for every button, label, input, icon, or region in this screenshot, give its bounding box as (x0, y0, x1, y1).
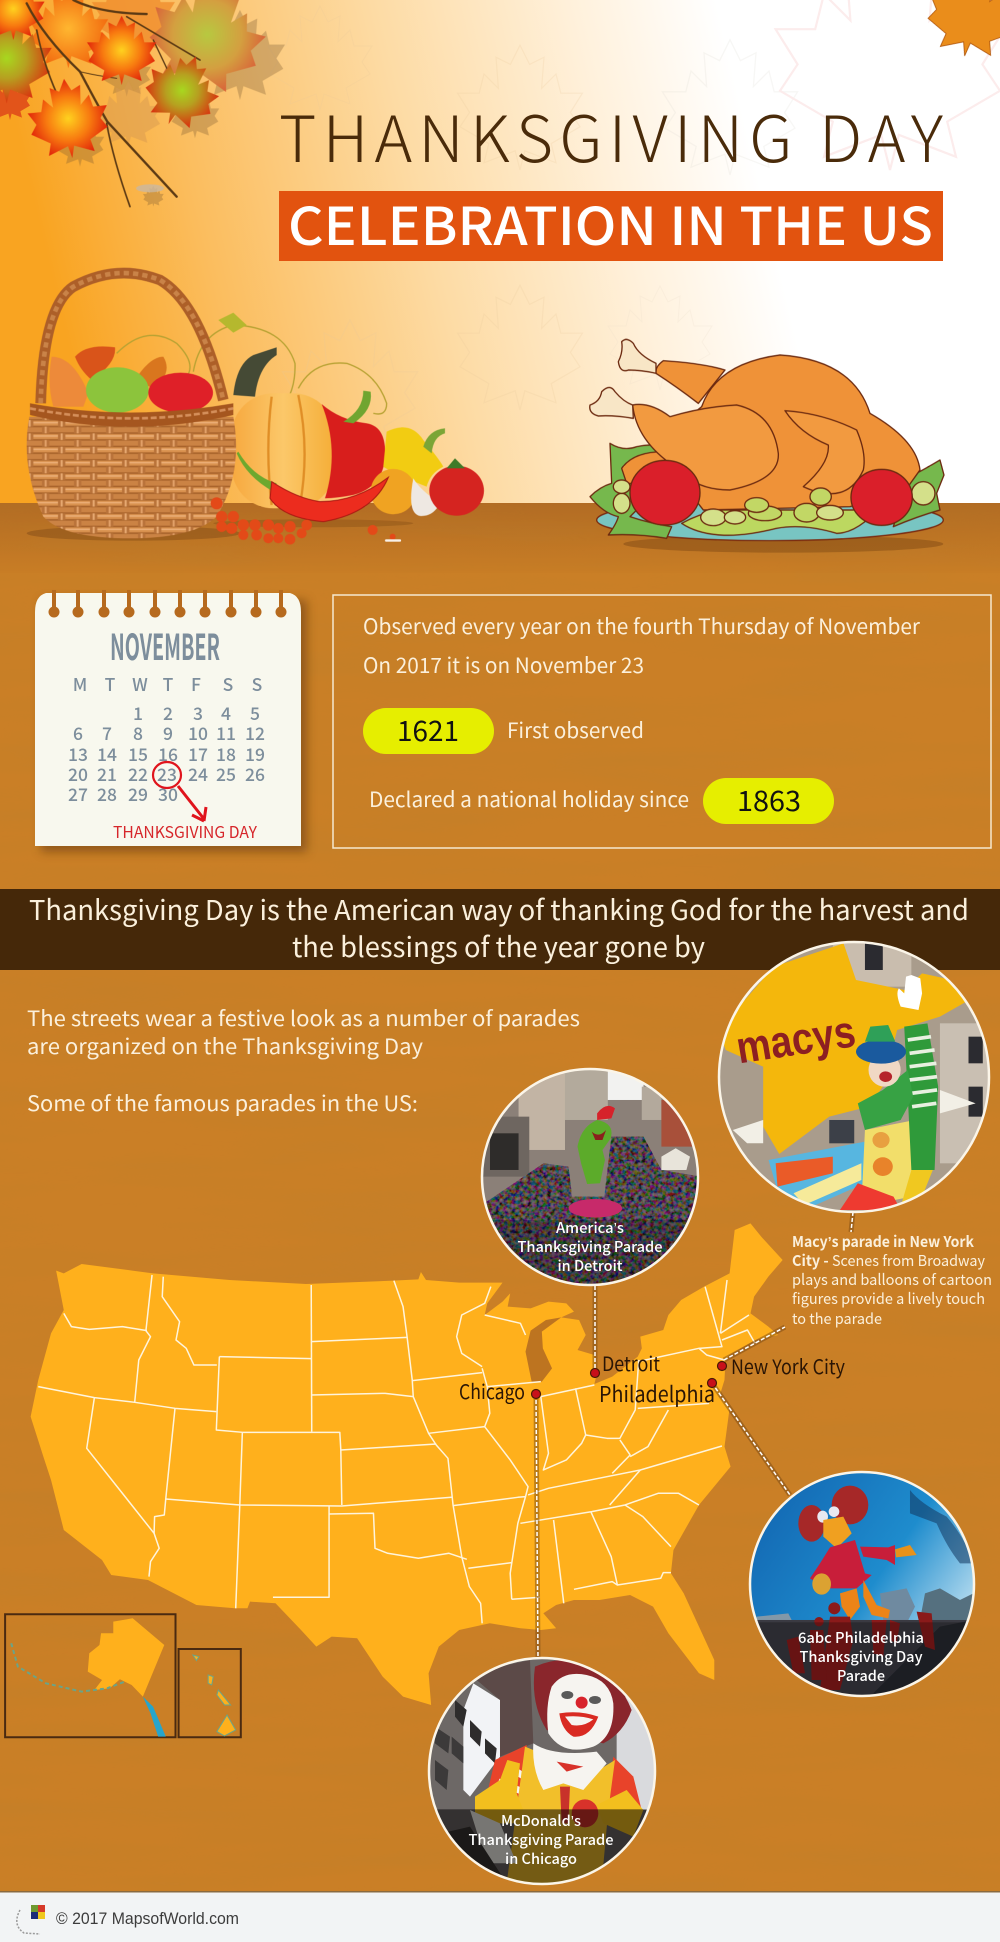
caption: Philadelphia: Parade (837, 1665, 885, 1686)
caption: Philadelphia (798, 1627, 924, 1686)
calendar dates: 15 (128, 742, 148, 767)
title: THANKSGIVING DAY (279, 89, 943, 181)
caption: Chicago: in Chicago (505, 1848, 577, 1869)
calendar dates (68, 701, 265, 807)
text: Macy's parade description: Macy’s parade in New York (792, 1231, 974, 1252)
panel: calendar: THANKSGIVING DAY (113, 819, 257, 843)
city marker: Philadelphia: Philadelphia (599, 1377, 715, 1409)
icon: MapsofWorld logo (17, 1905, 45, 1934)
calendar dates: 30 (158, 782, 178, 807)
calendar dates: 25 (216, 762, 236, 787)
calendar dates: 7 (102, 721, 112, 746)
calendar dates: 21 (97, 762, 117, 787)
illustration: roast turkey on platter (590, 340, 944, 553)
caption: Detroit (518, 1217, 662, 1276)
text: Macy's parade description: plays and balloons of cartoon (792, 1269, 992, 1290)
calendar weekday row: F (191, 672, 201, 697)
calendar weekday row: T (163, 672, 174, 697)
intro text: Some of the famous parades in the US: (27, 1088, 418, 1118)
calendar dates: 12 (245, 721, 265, 746)
title banner: CELEBRATION IN THE US (288, 185, 933, 260)
calendar weekday row: T (105, 672, 116, 697)
calendar dates: 2 (163, 701, 173, 726)
connector: New York (724, 1212, 853, 1360)
panel: key facts: Declared a national holiday since (369, 784, 689, 814)
connector: Detroit (592, 1286, 598, 1372)
pill: 1621 (363, 708, 494, 754)
city marker: Chicago: Chicago (459, 1376, 525, 1405)
panel: calendar: NOVEMBER (110, 619, 220, 671)
text: Macy's parade description: to the parade (792, 1308, 882, 1329)
footer: © 2017 MapsofWorld.com (56, 1910, 239, 1928)
statement band: the blessings of the year gone by (292, 925, 705, 965)
faint leaf outlines in header (268, 0, 1000, 455)
leaf: top right corner (921, 0, 1000, 64)
calendar dates: 11 (216, 721, 236, 746)
inset: Hawaii (179, 1649, 241, 1737)
intro text: are organized on the Thanksgiving Day (27, 1031, 423, 1061)
calendar dates: 22 (128, 762, 148, 787)
calendar dates: 28 (97, 782, 117, 807)
calendar dates: 10 (188, 721, 208, 746)
background: header gradient (0, 0, 1000, 503)
statement band: Thanksgiving Day is the American way of thanking God for the harvest and (29, 888, 969, 928)
panel: key facts: Observed every year on the fourth Thursday of November (363, 611, 921, 641)
caption: Philadelphia: 6abc Philadelphia (798, 1627, 924, 1648)
panel: calendar (35, 590, 307, 852)
pill: 1863 (703, 778, 834, 824)
calendar dates: 16 (158, 742, 178, 767)
calendar weekday row: S (223, 672, 233, 697)
text: Macy's parade description (792, 1231, 992, 1329)
illustration: fruit basket and vegetables (27, 273, 484, 545)
calendar dates: 6 (73, 721, 83, 746)
text: Macy's parade description: City - Scenes from Broadway (792, 1250, 985, 1271)
pill: 1863: 1863 (737, 780, 801, 820)
statement band (0, 888, 1000, 970)
calendar dates: 20 (68, 762, 88, 787)
calendar dates: 27 (68, 782, 88, 807)
calendar weekday row: W (132, 672, 148, 697)
caption: Chicago (468, 1810, 614, 1869)
calendar dates: 17 (188, 742, 208, 767)
pill: 1621: 1621 (397, 710, 459, 750)
photo circle: Macy's parade (719, 940, 990, 1213)
calendar dates: 3 (193, 701, 203, 726)
calendar dates: 8 (133, 721, 143, 746)
calendar dates: 29 (128, 782, 148, 807)
city marker: Detroit: Detroit (602, 1348, 660, 1377)
calendar weekday row: S (252, 672, 262, 697)
autumn leaves and branches, top left (0, 0, 285, 207)
caption: Detroit: America’s (556, 1217, 624, 1238)
calendar dates: 9 (163, 721, 173, 746)
calendar weekday row (73, 672, 262, 697)
calendar binding rings (48, 590, 286, 618)
panel: key facts: On 2017 it is on November 23 (363, 650, 644, 680)
photo circle: McDonald's parade (427, 1657, 660, 1890)
calendar dates: 19 (245, 742, 265, 767)
inset: Alaska (5, 1614, 176, 1737)
calendar dates: 26 (245, 762, 265, 787)
calendar dates: 23 (157, 762, 177, 787)
calendar dates: 24 (188, 762, 208, 787)
calendar dates: 5 (250, 701, 260, 726)
panel: key facts: First observed (507, 715, 644, 745)
calendar weekday row: M (73, 672, 87, 697)
footer (0, 1891, 1000, 1942)
connector: Philadelphia (712, 1383, 790, 1495)
photo circle: Philadelphia parade (750, 1470, 977, 1699)
caption: Philadelphia: Thanksgiving Day (800, 1646, 923, 1667)
city marker: New York City: New York City (731, 1351, 846, 1380)
panel: key facts (333, 595, 991, 848)
map: contiguous United States (31, 1223, 783, 1705)
calendar dates: 18 (216, 742, 236, 767)
calendar dates: 1 (133, 701, 143, 726)
intro text (27, 1003, 580, 1118)
connector: Chicago (536, 1394, 538, 1658)
caption: Detroit: Thanksgiving Parade (518, 1236, 662, 1257)
background: wood section (0, 503, 1000, 1892)
calendar dates: 13 (68, 742, 88, 767)
caption: Detroit: in Detroit (558, 1255, 623, 1276)
calendar dates: 14 (97, 742, 117, 767)
text: Macy's parade description: figures provide a lively touch (792, 1288, 985, 1309)
caption: Chicago: McDonald’s (501, 1810, 581, 1831)
photo circle: Detroit parade (479, 1067, 701, 1287)
photo circle: Macy's parade: macys (732, 1006, 859, 1073)
red circle and arrow marking the 23rd (153, 762, 206, 821)
caption: Chicago: Thanksgiving Parade (468, 1829, 614, 1850)
calendar dates: 4 (221, 701, 231, 726)
intro text: The streets wear a festive look as a number of parades (27, 1003, 580, 1033)
